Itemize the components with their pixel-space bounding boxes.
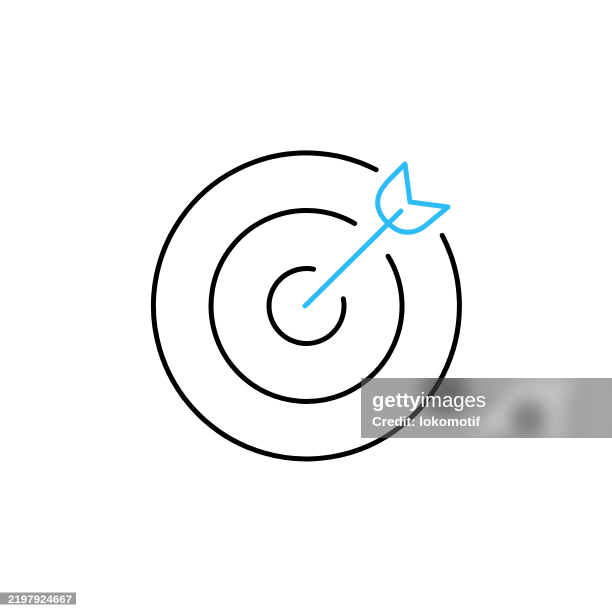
outer ring [153, 153, 459, 459]
watermark logo text: gettyimages [372, 389, 486, 412]
target rings [153, 153, 459, 459]
rings seen through the watermark [361, 378, 444, 438]
middle ring [211, 210, 402, 401]
arrow [305, 164, 448, 306]
watermark background shapes [413, 378, 576, 438]
watermark banner [361, 378, 612, 438]
image id tag [0, 592, 76, 606]
arrow shaft [305, 211, 401, 306]
arrow fletching [378, 164, 448, 232]
inner ring [269, 269, 344, 344]
image id number: 2197924667 [8, 594, 72, 606]
watermark credit: Credit: lokomotif [372, 415, 481, 429]
